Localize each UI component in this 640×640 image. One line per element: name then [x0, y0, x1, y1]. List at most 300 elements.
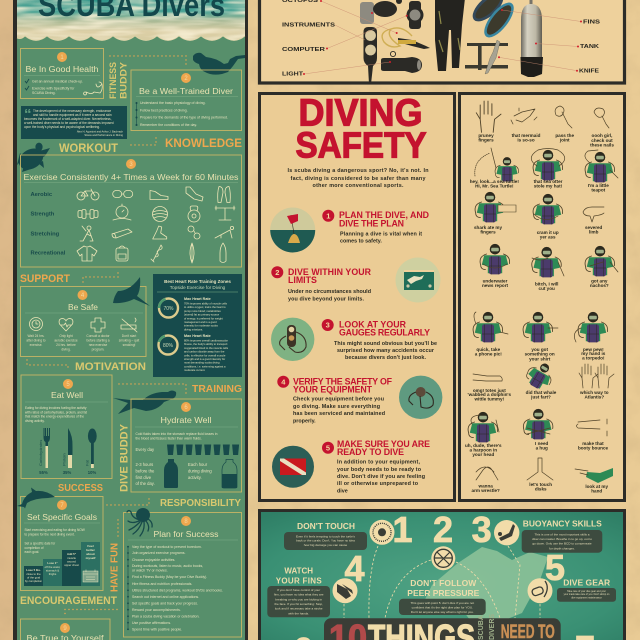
chart: goal steps: muscle [67, 556, 76, 560]
panel: heart rate zones: strength and is a good intensity for [184, 357, 225, 361]
signal: sea turtle [470, 148, 519, 188]
signal: dolphin tummy: omg! totes just [473, 388, 506, 393]
section 7: specific goals: to prepare for the next diving event. [24, 532, 75, 536]
icon: mask badge [528, 578, 552, 603]
tip 5: ready to dive: MAKE SURE YOU ARE [337, 439, 430, 449]
icon: dumbbell [78, 210, 98, 218]
section 8: plan for success: Hire fitness and nutrition professionals. [132, 582, 192, 586]
icon: dolphin [17, 488, 55, 508]
intro text: other more conventional sports. [312, 183, 404, 189]
icon: octopus regulator [399, 376, 442, 419]
tip: dive gear: DIVE GEAR [563, 578, 610, 588]
section 8: plan for success [124, 512, 242, 637]
section 5: eat well: 5 [66, 382, 70, 388]
section 6: hydrate well: Each hour [188, 462, 208, 467]
signal: check nails [590, 108, 614, 148]
pointer lines [304, 1, 581, 74]
tip: don't follow peer pressure: DON'T FOLLOW [410, 578, 477, 588]
signal: check nails: oooh girl, [592, 133, 612, 138]
chart: goal steps: thighs [49, 572, 57, 576]
signal: something on shirt: you got [531, 347, 548, 352]
signal: nachos: nachos? [590, 283, 609, 288]
chart: goal steps: stomach & [46, 568, 59, 572]
section 8: plan for success: Join organized exercise programs. [132, 551, 186, 555]
panel: 10 things scuba divers need to know [260, 509, 624, 640]
chart: 70% ring: 70% [163, 306, 174, 312]
icon: swim goggles [113, 190, 133, 198]
section 4: be safe: diving. [61, 348, 71, 352]
tip 5: ready to dive [272, 439, 430, 494]
tip 1: plan the dive: DIVE THE PLAN [339, 218, 404, 228]
icon: manta ray [113, 277, 150, 306]
heading: responsibility: RESPONSIBILITY [160, 498, 241, 509]
chart: goal steps: around [67, 560, 76, 564]
signal: arm wrestle [472, 467, 500, 493]
tip 3: look at gauges: 3 [326, 321, 330, 330]
icon: diver silhouette [113, 390, 176, 414]
icon: running shoe [186, 187, 203, 201]
icon: no smoking [121, 318, 137, 332]
signal: teapot [585, 150, 618, 192]
intro text: fact, diving is considered to be safer than many [290, 176, 426, 182]
signal: check nails: these nails [590, 142, 614, 148]
section 8: plan for success: Choose enjoyable activities. [132, 558, 175, 562]
panel: heart rate zones: (stored) fat as primary source [184, 313, 220, 317]
signal: shark fingers: fingers [480, 230, 496, 234]
signal: look at my hand: look at my [585, 484, 608, 489]
dotted connector [107, 495, 149, 505]
section 1: be in good health: Be In Good Health [26, 64, 99, 74]
signal: pruney fingers [476, 101, 501, 142]
signal: dolphin tummy: 'wabbed a dolphin's [468, 392, 512, 397]
heading: knowledge: KNOWLEDGE [165, 136, 242, 150]
icon: full water bottle [164, 459, 178, 488]
section 4: be safe: 24 hrs. before [56, 343, 76, 347]
section 7: specific goals [20, 496, 103, 590]
signal: mermaid [511, 108, 541, 142]
tip 1: plan the dive [270, 208, 429, 252]
tip: watch your fins: breaking or who you are kicking in [275, 597, 322, 601]
tip: dive gear: dive equipment maintenance [571, 596, 602, 599]
number 2: 2 [433, 509, 453, 550]
signal: harpoon [465, 412, 502, 457]
panel: heart rate zones: Max Heart Rate [184, 297, 211, 301]
tip: don't follow peer pressure: This goes with point 5: don't dive if you are not [411, 601, 474, 605]
tip 2: dive within limits: you dive beyond your limits. [288, 296, 364, 302]
signal: sea otter [531, 148, 565, 188]
signal: harpoon: a harpoon in [470, 448, 497, 453]
wave edge [17, 36, 245, 40]
section 8: plan for success: Plan a scuba diving vacation or celebration. [132, 614, 200, 618]
section 2: well-trained diver: Understand the basic physiology of diving. [140, 101, 206, 105]
chart: goal steps: by completion [25, 579, 43, 583]
section 8: plan for success: Set specific goals and track your progress. [132, 602, 198, 606]
icon: insoles [218, 186, 230, 202]
signal: cram it: yer ass [540, 234, 556, 240]
section 2: well-trained diver [131, 70, 242, 130]
signal: booty bounce: make that [582, 441, 604, 446]
section 5: eat well: with ratios of carbohydrates, protein, and fat [25, 410, 87, 414]
tip: don't follow peer pressure: confident that it's the right dive plan for YOU. [412, 606, 473, 610]
section 4: be safe: Don't start [122, 334, 136, 338]
number 1: 1 [392, 509, 413, 550]
dotted connector [27, 360, 68, 370]
tip: don't touch: Even if it feels tempting to touch the turtle's [296, 534, 355, 538]
signal: phone pic [473, 312, 508, 356]
panel: heart rate zones: 80% improves overall cardiovascular [184, 338, 228, 342]
tip: don't follow peer pressure: PEER PRESSURE [407, 588, 480, 598]
left paper margin [0, 0, 14, 640]
vertical label: have fun: HAVE FUN [108, 543, 120, 592]
tip 4: verify equipment: has been serviced and maintained [293, 411, 385, 417]
icon: backpack [116, 246, 128, 261]
section 7: specific goals: each goal. [24, 550, 39, 554]
tip 4: verify equipment: Check your equipment before you [293, 397, 384, 403]
section 8: plan for success: During workouts, listen to music, audio books, [132, 564, 203, 568]
row labels: Aerobic [30, 192, 53, 198]
section 7: specific goals: 7 [60, 503, 64, 509]
tip: watch your fins: the face. If you hit something: Stop, [274, 602, 323, 606]
section 3: exercise [20, 155, 242, 267]
tip 5: ready to dive: your body needs to be ready to [337, 467, 422, 473]
icon: wetsuit top [77, 246, 97, 261]
section 4: be safe: new exercise [89, 343, 108, 347]
signal: teapot: I'm a little [588, 183, 609, 188]
dotted connector [65, 610, 117, 615]
section 4: be safe: before starting a [86, 338, 110, 342]
signal: check nails: check out [591, 138, 613, 143]
section 4: be safe: Consult a doctor [86, 334, 111, 338]
section 6: hydrate well: during diving [188, 468, 212, 474]
section 1: be in good health: Exercise with Specificity for [32, 86, 75, 90]
section 4: be safe: 4 [81, 293, 85, 299]
icon: buoy and flag [270, 208, 315, 252]
icon: stretching figure [80, 226, 93, 241]
signal: teapot: teapot [591, 188, 606, 192]
icon: medical cross [91, 318, 105, 332]
chart: goal steps: of the goal [27, 576, 40, 580]
signal: pass the joint [555, 106, 574, 142]
tip: buoyancy skills: diver can master. Breathe in to go up, out to [532, 537, 592, 541]
panel: hand signals [460, 94, 624, 500]
section 4: be safe: Be Safe [68, 302, 98, 312]
section 8: plan for success: or watch TV or movies. [132, 568, 168, 572]
callout: quote: and skill to handle equipment as if it were a second skin [33, 113, 112, 117]
callout: quote: “ [24, 106, 32, 123]
tip 1: plan the dive: Planning a dive is vital when it [340, 231, 422, 237]
section 2: well-trained diver: Prepare for the demands of the type of diving performed. [140, 116, 228, 120]
signal: arm wrestle: arm wrestle? [472, 488, 500, 493]
vertical label: fitness buddy: BUDDY [118, 61, 130, 99]
tip: buoyancy skills: go down. Only use the BCD to compensate [532, 542, 592, 546]
title: safety: SAFETY [296, 124, 426, 166]
intro text [288, 168, 428, 189]
equipment labels [282, 0, 601, 78]
icon: fin kicking badge [494, 520, 519, 545]
heading: encouragement: ENCOURAGEMENT [20, 595, 118, 607]
tip 1: plan the dive: PLAN THE DIVE, AND [339, 210, 429, 220]
chart: cutlery proportions: Fat [84, 459, 90, 466]
signal: sea turtle: Hi, Mr. Sea Turtle! [475, 184, 514, 188]
section 9: be true to yourself: 9 [63, 626, 67, 632]
tip 4: verify equipment: go diving. Make sure everything [293, 404, 380, 410]
section 4: be safe: after diving to [26, 338, 46, 342]
tip 2: dive within limits: LIMITS [288, 275, 317, 285]
tip 4: verify equipment [277, 376, 442, 425]
heading: success: SUCCESS [58, 483, 103, 494]
signal: severed limb: severed [585, 225, 603, 230]
section 8: plan for success: Find a Fitness Buddy (May be your Dive Buddy). [132, 575, 207, 579]
number 3: 3 [472, 509, 492, 550]
tip 5: ready to dive: In addition to your equipment, [337, 460, 420, 466]
signal: something on shirt: something on [525, 352, 555, 356]
signal: harpoon: uh, dude, there's [465, 443, 502, 448]
section 5: eat well: that match the energy-expenditures of the [25, 415, 84, 419]
signal: news report [480, 244, 510, 288]
signal: touch disks [527, 458, 553, 491]
dotted connector [131, 135, 156, 145]
icon: bike [77, 189, 99, 200]
section 3: exercise: Exercise Consistently 4+ Times a Week for 60 Minutes [24, 172, 238, 182]
signal: hug: I need [535, 441, 549, 446]
icon: wetsuit [435, 0, 465, 71]
banner: 10 things scuba divers need to know: DIVERS [489, 614, 496, 640]
tip: watch your fins: fins, you have no idea what they are [274, 593, 324, 597]
signal: booty bounce [576, 419, 608, 451]
dashed routes [344, 546, 540, 618]
icon: surfboard [190, 243, 194, 263]
section 9: be true to yourself [20, 619, 110, 640]
signal: sea otter: stole my hat! [534, 184, 563, 188]
tip: watch your fins: If you don't have control of your [277, 588, 320, 592]
signal: cut you: cut you [539, 286, 555, 291]
icon: calendar [83, 570, 98, 582]
icon: stopwatch [113, 204, 131, 220]
panel: heart rate zones: fitness, the body's ability to transport [184, 342, 228, 346]
icon: octopus [127, 508, 152, 536]
icon: heart [59, 318, 73, 331]
icon: climbing rope [151, 245, 162, 262]
tip: watch your fins: with the hands. [288, 611, 309, 615]
signal: news report: news report [482, 283, 508, 288]
heading: training: TRAINING [192, 384, 242, 395]
icon: half water bottle [222, 460, 237, 488]
tip 5: ready to dive: READY TO DIVE [337, 447, 404, 457]
section 6: hydrate well: Hydrate Well [160, 415, 212, 425]
section 3: exercise: 3 [129, 162, 133, 168]
section 4: be safe: Only light [59, 334, 73, 338]
panel: heart rate zones [153, 274, 242, 377]
equipment labels: INSTRUMENTS [282, 22, 336, 28]
icon: flashlight [381, 51, 422, 73]
panel: heart rate zones: management and is a good [184, 320, 217, 324]
signal: dolphin tummy: wittle tummy! [473, 396, 505, 402]
signal: torpedo hand: a torpedo! [582, 356, 605, 360]
signal: nachos: got any [591, 278, 608, 284]
chart: goal steps [24, 542, 100, 586]
section 5: eat well: diving activity. [25, 419, 45, 423]
section 6: hydrate well: 6 [184, 405, 188, 411]
section 8: plan for success: Search out internet and online applications. [132, 595, 199, 599]
section 8: plan for success: Vary the type of workout to prevent boredom. [132, 545, 202, 549]
tip: dive gear: Take care of your dive gear and your [567, 590, 606, 593]
panel: heart rate zones: Max Heart Rate [184, 334, 211, 338]
section 4: be safe: Wait 24 hrs. [28, 334, 45, 338]
panel: heart rate zones: oxygenated blood to the muscle cells [184, 346, 229, 350]
signal: phone pic: quick, take [476, 347, 501, 352]
banner: 10 things scuba divers need to know [324, 614, 561, 640]
signal: dolphin tummy [468, 374, 512, 402]
section 8: plan for success: 8 [184, 519, 188, 525]
panel: heart rate zones: moderate current. [184, 368, 205, 372]
tip: watch your fins: look and if necessary take a stroke [275, 607, 323, 611]
signal: arm wrestle: wanna [478, 484, 493, 488]
tip 2: dive within limits [271, 258, 440, 302]
signal: pruney fingers: fingers [478, 138, 494, 142]
tip: don't touch: how big damage you can cause [304, 543, 348, 547]
panel: heart rate zones: conditions, i.e. swimming against a [184, 364, 226, 368]
section 6: hydrate well [131, 399, 242, 492]
tip 2: dive within limits: 2 [275, 268, 279, 277]
chart: goal steps: Lose 1" [47, 561, 58, 565]
tip: don't follow peer pressure [399, 578, 486, 615]
tip 3: look at gauges: GAUGES REGULARLY [339, 328, 430, 338]
tip 2: dive within limits: Under no circumstances should [288, 289, 371, 295]
panel: heart rate zones: Best Heart Rate Training Zones [164, 279, 231, 284]
signal: cut you [532, 247, 564, 291]
signal: which way: Atlantis? [584, 394, 604, 400]
signal: torpedo hand: my hand is [581, 351, 606, 356]
callout: quote: becomes the trademark of a well-adapted diver. Nevertheless, [24, 117, 112, 121]
vertical label: fitness buddy: FITNESS [108, 61, 119, 99]
callout: quote: Alex H. Agostoni and Arthur J. Bachrach [77, 130, 124, 134]
section 4: be safe: smoking! [123, 343, 135, 347]
signal: pass the joint: joint [559, 138, 570, 142]
signal: cram it [533, 194, 563, 240]
section 8: plan for success: Spend time with positive people. [132, 628, 182, 632]
tip: buoyancy skills: This is one of the most important skills a [534, 532, 590, 536]
number 5: 5 [545, 547, 565, 588]
signal: touch disks: let's touch [529, 482, 552, 487]
panel: diving safety [260, 92, 454, 500]
signal: which way: which way to [579, 390, 609, 395]
chart: goal steps: Lose 5 lbs. [26, 568, 41, 572]
panel: heart rate zones: of energy; is preferred for weight [184, 316, 223, 320]
section 5: eat well: Eat Well [51, 390, 83, 400]
icon: dive computer watch [406, 1, 424, 29]
tip: don't follow peer pressure: Don't let anyone else say what is right for you. [411, 610, 474, 614]
tip 4: verify equipment: YOUR EQUIPMENT [293, 384, 373, 394]
signal: severed limb [583, 207, 604, 234]
signal: severed limb: limb [589, 230, 599, 234]
tip 4: verify equipment: 4 [281, 377, 286, 386]
signal: touch disks: disks [535, 486, 547, 491]
section 1: be in good health: 1 [60, 55, 64, 61]
callout: quote [21, 106, 127, 139]
panel: heart rate zones: and carbon dioxide away from the [184, 350, 225, 354]
signal: whale: did that whale [526, 390, 557, 395]
dotted connector [119, 384, 186, 395]
signal: something on shirt: your shirt [529, 356, 551, 362]
signal: shark fingers: shark ate my [474, 225, 502, 230]
section 1: be in good health: Get an annual medical check-up. [32, 80, 83, 84]
icon: coral badge [370, 520, 394, 545]
icon: scuba tank [520, 0, 543, 77]
tip 5: ready to dive: ill or otherwise unprepared to [337, 481, 419, 487]
tip: watch your fins: YOUR FINS [276, 576, 322, 585]
tip 3: look at gauges: because divers don't just look. [345, 355, 426, 361]
chart: goal steps: better [86, 548, 96, 552]
section 5: eat well: Eating for diving involves fueling the activity [25, 406, 87, 410]
callout: quote: a well-trained diver needs to be aware of the demands imposed [24, 121, 114, 125]
tip 5: ready to dive: dive. Don't dive if you are feeling [337, 474, 425, 480]
equipment labels: LIGHT [282, 72, 303, 78]
tip 2: dive within limits: DIVE WITHIN YOUR [288, 267, 372, 277]
chart: cutlery proportions: Protein [62, 453, 66, 466]
section 4: be safe [20, 286, 146, 356]
signal: pass the joint: pass the [555, 133, 574, 138]
equipment labels: COMPUTER [282, 47, 326, 53]
dotted connector [83, 271, 118, 282]
dotted connector [117, 520, 119, 537]
chart: goal steps: Add 5" [67, 552, 77, 556]
intro text: Is scuba diving a dangerous sport? No, it's not. In [288, 168, 428, 174]
chart: goal steps: about [86, 552, 95, 556]
row labels: Recreational [30, 250, 66, 256]
equipment labels: FINS [583, 20, 601, 26]
chart: goal steps: myself [86, 556, 96, 560]
tip: watch your fins [267, 566, 330, 617]
tip: buoyancy skills [522, 519, 602, 553]
tip 5: ready to dive: 5 [326, 443, 330, 452]
section 8: plan for success: Plan for Success [154, 529, 218, 539]
icon: push-up [215, 226, 234, 238]
signal: news report: underwater [483, 278, 508, 284]
chart: eight glasses [167, 444, 239, 455]
signal: sea otter: that sea otter [534, 179, 563, 184]
callout: quote: Stress and Performance in Diving [84, 133, 124, 137]
tip 4: verify equipment: VERIFY THE SAFETY OF [293, 376, 393, 386]
section 7: specific goals: Set Specific Goals [27, 512, 97, 522]
section 6: hydrate well: before the [136, 468, 155, 474]
panel: heart rate zones: to utilize oxygen; trains the heart to [184, 305, 226, 309]
signal: nachos [585, 246, 618, 288]
chart: cutlery proportions: 10% [88, 470, 96, 475]
tip: don't touch [284, 521, 367, 550]
signal: harpoon: your head [472, 452, 494, 457]
icon: fins [468, 0, 519, 42]
panel: heart rate zones: intensity for moderate scuba [184, 324, 218, 328]
signal: phone pic: a phone pic! [475, 352, 502, 356]
tip: don't touch: back or the corals: Don't. You have no idea [296, 539, 355, 543]
tip 3: look at gauges: LOOK AT YOUR [339, 320, 407, 330]
icon: turtle [15, 143, 50, 174]
section 4: be safe: exercise. [30, 343, 42, 347]
signal: booty bounce: booty bounce [578, 446, 608, 451]
signal: sea turtle: hey, look...a sea turtle! [470, 179, 519, 184]
icon: paddle board [220, 243, 226, 262]
icon: gauge console [364, 27, 377, 84]
section 6: hydrate well: activity. [188, 475, 202, 480]
chart: cutlery proportions: 35% [63, 470, 71, 475]
section 4: be safe: aerobic exercise [54, 338, 78, 342]
chart: cutlery proportions: 55% [39, 470, 48, 475]
icon: kettlebell [188, 206, 200, 222]
panel: heart rate zones: most demanding scuba diving [184, 361, 220, 365]
section 6: hydrate well: 2-3 hours [136, 462, 153, 467]
section 2: well-trained diver: Follow best practices of diving. [140, 108, 188, 112]
section 7: specific goals: Start exercising and eating for diving NOW [24, 528, 85, 532]
